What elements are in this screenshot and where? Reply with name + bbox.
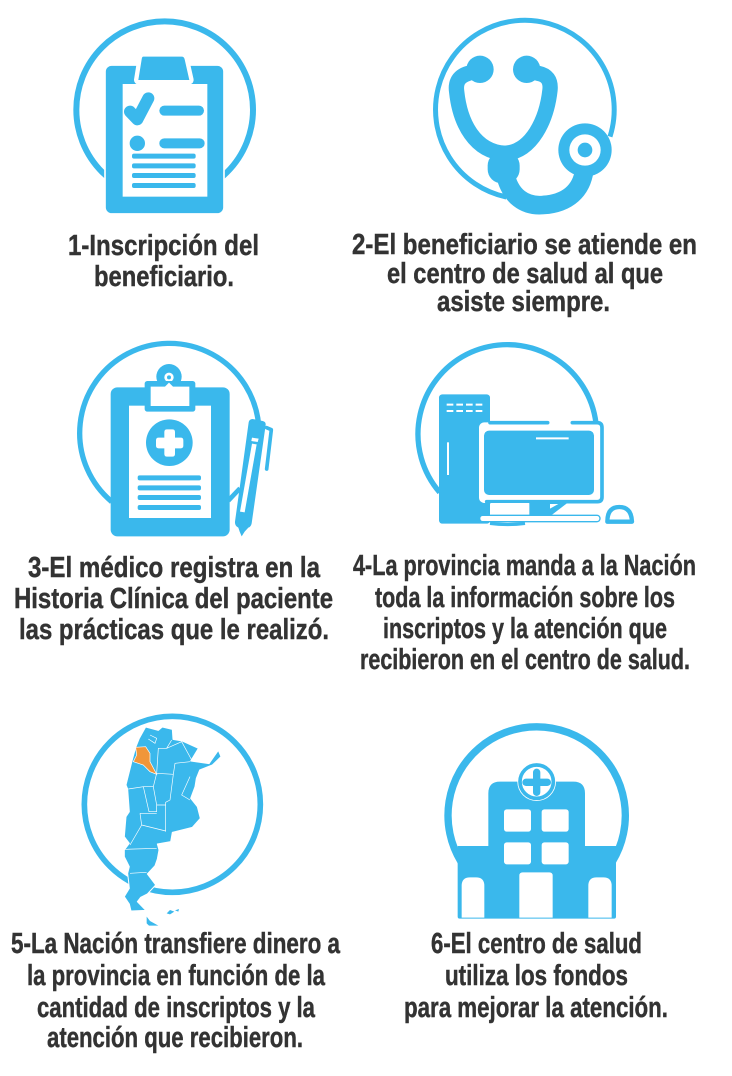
icon: stethoscope (436, 20, 614, 205)
heading: step 6: 6-El centro de salud (431, 928, 642, 960)
heading: step 5: atención que recibieron. (47, 1022, 303, 1054)
icon: map of Argentina (84, 716, 260, 926)
heading: step 5: la provincia en función de la (27, 960, 326, 992)
icon: medical clipboard with pen (80, 343, 271, 536)
icon: hospital building (448, 727, 625, 919)
heading: step 3: Historia Clínica del paciente (14, 583, 333, 615)
heading: step 2 (352, 229, 697, 318)
heading: step 3: las prácticas que le realizó. (19, 614, 329, 646)
heading: step 2: el centro de salud al que (387, 258, 663, 290)
heading: step 6: utiliza los fondos (445, 960, 628, 992)
heading: step 5 (11, 928, 341, 1054)
icon: desktop computer (418, 345, 632, 524)
heading: step 2: asiste siempre. (437, 286, 610, 318)
heading: step 3: 3-El médico registra en la (28, 552, 321, 584)
heading: step 4 (353, 550, 696, 676)
heading: step 1 (68, 230, 259, 293)
icon: clipboard with checklist (76, 21, 253, 214)
heading: step 5: 5-La Nación transfiere dinero a (11, 928, 341, 960)
heading: step 5: cantidad de inscriptos y la (37, 992, 316, 1024)
heading: step 6 (404, 928, 668, 1024)
heading: step 1: 1-Inscripción del (68, 230, 259, 262)
heading: step 3 (14, 552, 333, 646)
heading: step 1: beneficiario. (94, 261, 234, 293)
